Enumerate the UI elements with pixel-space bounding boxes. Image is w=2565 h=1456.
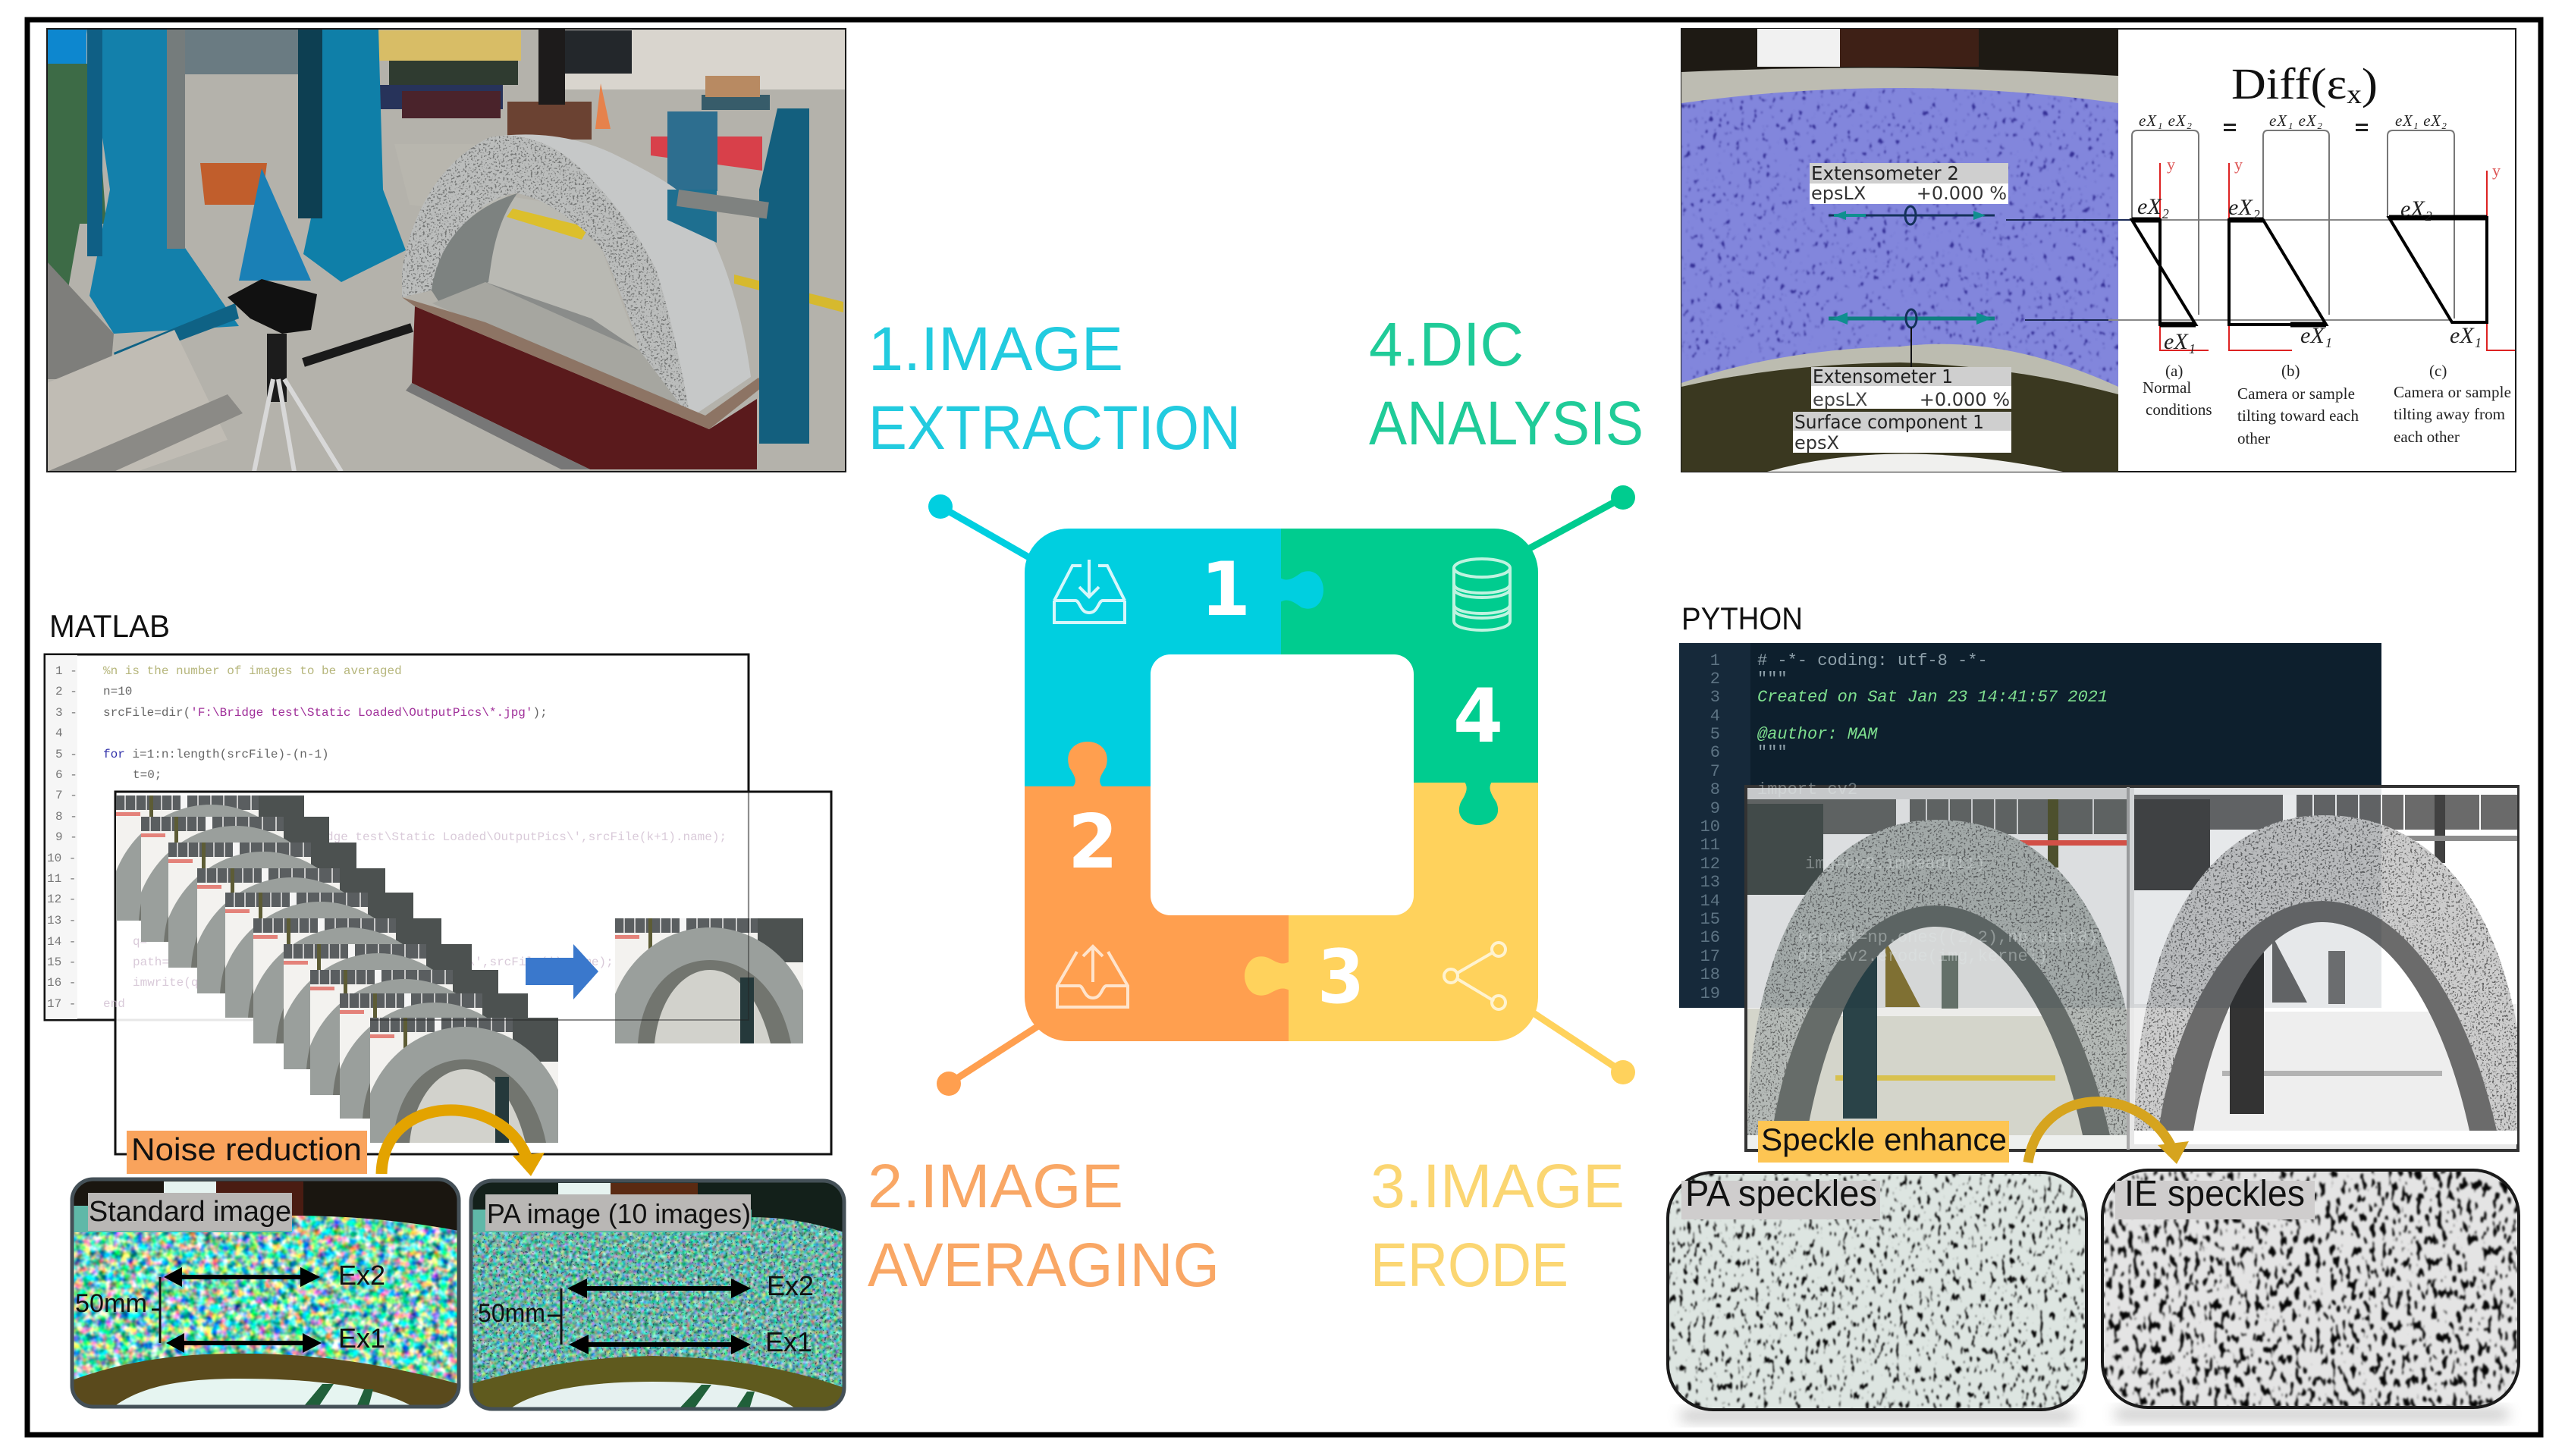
line numbers: 5: [1710, 725, 1720, 744]
title: 3.IMAGE ERODE: [1370, 1152, 1625, 1300]
panel: IE speckles: [2102, 1170, 2519, 1420]
line numbers: 3 -: [55, 706, 77, 720]
icon: download inbox: [1054, 560, 1125, 623]
diagram a: normal conditions: Normal: [2143, 378, 2191, 397]
code showing through photo: [1747, 780, 2381, 1008]
line numbers: 6: [1710, 743, 1720, 762]
diagram b: tilting toward: eX₁: [2300, 323, 2332, 348]
colour arch photo: [1747, 788, 2142, 1149]
connector: step 3 pin: [1534, 1013, 1635, 1084]
averaging overlay panel: [115, 792, 831, 1154]
diagram b: tilting toward: eX₁ eX₂: [2269, 111, 2322, 130]
extensometer 1 label: epsLX: [1813, 389, 1867, 410]
Ex labels: [338, 1260, 385, 1354]
diagram a: normal conditions: eX₁: [2164, 329, 2196, 354]
diagram a: normal conditions: [2132, 111, 2212, 419]
code text: Created on Sat Jan 23 14:41:57 2021: [1757, 688, 2108, 707]
50mm gauge: [478, 1288, 561, 1345]
line numbers: 1 -: [55, 664, 77, 678]
line numbers: 17 -: [47, 997, 76, 1011]
title: 4.DIC ANALYSIS: ANALYSIS: [1369, 389, 1644, 458]
diagram b: tilting toward: other: [2237, 429, 2270, 447]
title: 2.IMAGE AVERAGING: 2.IMAGE: [868, 1152, 1123, 1221]
line numbers: 10: [1700, 817, 1720, 836]
line numbers: 18: [1700, 965, 1720, 984]
faded code under overlay: path=strcat('F:\Bridge test\Static Loaded\Bath\',srcFile(i).name);: [133, 956, 614, 969]
diagram a: normal conditions: eX₂: [2137, 194, 2169, 219]
speckle comparison photos: [1746, 783, 2529, 1150]
code text: %n is the number of images to be averaged: [103, 664, 402, 678]
diagram c: tilting away: eX₁: [2450, 323, 2482, 348]
line numbers: 11: [1700, 836, 1720, 855]
code text: n=10: [103, 685, 132, 698]
title: 1.IMAGE EXTRACTION: [868, 315, 1241, 463]
line numbers: 13: [1700, 873, 1720, 892]
Ex1 arrow: [166, 1333, 322, 1353]
line numbers: 9 -: [55, 830, 77, 844]
line numbers: 5 -: [55, 748, 77, 761]
title: 1.IMAGE EXTRACTION: EXTRACTION: [868, 394, 1241, 463]
line numbers: 8 -: [55, 810, 77, 824]
faded code window edge: [370, 792, 749, 1020]
line numbers: 4: [1710, 707, 1720, 726]
surface component label: [1793, 411, 2011, 453]
diagram b: tilting toward: eX₂: [2228, 195, 2260, 220]
line numbers: 7 -: [55, 789, 77, 802]
panel: PA speckles: [1668, 1172, 2086, 1421]
title: 3.IMAGE ERODE: ERODE: [1370, 1231, 1568, 1300]
label: Noise reduction: Noise reduction: [131, 1131, 362, 1167]
diagram a: normal conditions: conditions: [2146, 400, 2212, 419]
code text: for i=1:n:length(srcFile)-(n-1): [103, 748, 329, 761]
code text: @author: MAM: [1757, 725, 1878, 744]
line numbers: 12: [1700, 855, 1720, 874]
Ex labels: Ex1: [338, 1323, 385, 1354]
diagram c: tilting away: [2388, 111, 2515, 446]
title: 1.IMAGE EXTRACTION: 1.IMAGE: [868, 315, 1123, 384]
line numbers: 13 -: [47, 914, 76, 927]
curved arrow: noise reduction: [381, 1110, 545, 1176]
diagram c: tilting away: each other: [2394, 428, 2460, 446]
connector: step 1 pin: [928, 494, 1033, 560]
extensometer 1 label: Extensometer 1: [1813, 366, 1953, 388]
Ex labels: Ex2: [338, 1260, 385, 1291]
line numbers: 7: [1710, 762, 1720, 781]
Python code window: [1679, 643, 2381, 1008]
puzzle nub: green: [1459, 782, 1498, 825]
50mm gauge: [75, 1277, 160, 1343]
Ex labels: Ex2: [767, 1270, 814, 1301]
line numbers: 19: [1700, 984, 1720, 1003]
panel: PA image: [471, 1181, 844, 1409]
line numbers: 12 -: [47, 893, 76, 906]
line numbers: 2: [1710, 670, 1720, 689]
DIC analysis panel: extensometer image and strain diagram: [1681, 29, 2516, 472]
faded code under overlay: end: [103, 997, 125, 1011]
icon: database: [1454, 559, 1510, 630]
grayscale enhanced arch photo: [2134, 783, 2529, 1144]
surface component label: epsX: [1794, 432, 1839, 453]
icon: share: [1444, 943, 1505, 1009]
diagram a: normal conditions: y: [2167, 155, 2175, 174]
code text: srcFile=dir('F:\Bridge test\Static Loaded\OutputPics\*.jpg');: [103, 706, 548, 720]
line numbers: 16: [1700, 928, 1720, 947]
numeral 1: 1: [1201, 547, 1251, 633]
line numbers: 2 -: [55, 685, 77, 698]
extensometer 2 label: [1810, 162, 2008, 204]
diagram b: tilting toward: Camera or sample: [2237, 384, 2355, 403]
line numbers: 10 -: [47, 852, 76, 865]
code showing through photo: kernel=np.ones((2,2),np.uint8): [1797, 928, 2098, 947]
code showing through photo: import cv2: [1757, 780, 1857, 799]
numeral 2: 2: [1068, 799, 1118, 886]
line numbers: 4: [55, 726, 63, 740]
title: 3.IMAGE ERODE: 3.IMAGE: [1370, 1152, 1625, 1221]
averaged result image: [606, 918, 814, 1043]
icon: upload inbox: [1057, 946, 1128, 1007]
code text: t=0;: [133, 768, 162, 782]
equals signs: [2224, 124, 2368, 131]
numeral 3: 3: [1317, 934, 1364, 1021]
line numbers: 9: [1710, 799, 1720, 818]
50mm gauge: 50mm: [75, 1289, 147, 1318]
line numbers: 3: [1710, 688, 1720, 707]
diagram title: Diff(ε: [2231, 59, 2337, 108]
diagram c: tilting away: Camera or sample: [2394, 383, 2511, 401]
diagram c: tilting away: eX₁ eX₂: [2395, 111, 2447, 130]
diagram a: normal conditions: (a): [2165, 362, 2183, 380]
line numbers: 15: [1700, 910, 1720, 929]
diagram b: tilting toward: y: [2234, 155, 2243, 174]
diagram c: tilting away: (c): [2429, 362, 2447, 380]
extensometer 2 label: epsLX: [1811, 183, 1866, 204]
diagram c: tilting away: eX₂: [2400, 196, 2432, 221]
title: 4.DIC ANALYSIS: 4.DIC: [1369, 310, 1524, 379]
line numbers: 11 -: [47, 872, 76, 886]
connector: step 2 pin: [937, 1025, 1041, 1096]
title: 2.IMAGE AVERAGING: [868, 1152, 1220, 1300]
centre hole: [1151, 654, 1414, 915]
diagram b: tilting toward: [2228, 111, 2359, 447]
faded code under overlay: q=: [133, 935, 147, 949]
diagram b: tilting toward: tilting toward each: [2237, 406, 2359, 425]
Ex labels: Ex1: [765, 1326, 812, 1357]
line numbers: 6 -: [55, 768, 77, 782]
line numbers: 15 -: [47, 956, 76, 969]
faded code under overlay: imwrite(q,path);: [133, 976, 250, 990]
diagram b: tilting toward: (b): [2281, 362, 2300, 380]
Ex2 arrow: [164, 1267, 320, 1287]
extensometer 2 label: +0.000 %: [1917, 183, 2007, 204]
PA speckles label: PA speckles: [1685, 1174, 1877, 1214]
extensometer 2 line: [1829, 206, 1995, 224]
standard image label: Standard image: [89, 1196, 291, 1228]
line numbers: 17: [1700, 947, 1720, 966]
diagram a: normal conditions: eX₁ eX₂: [2139, 111, 2192, 130]
blue arrow: [526, 944, 598, 999]
diagram c: tilting away: y: [2492, 161, 2501, 180]
line numbers: 14: [1700, 892, 1720, 911]
IE speckles label: IE speckles: [2124, 1174, 2305, 1214]
PA image label: PA image (10 images): [487, 1198, 751, 1229]
guide lines: [2006, 220, 2452, 320]
line numbers: 14 -: [47, 935, 76, 949]
line numbers: 8: [1710, 780, 1720, 799]
puzzle nub: cyan: [1280, 571, 1323, 609]
numeral 4: 4: [1453, 673, 1503, 760]
curved arrow: speckle enhance: [2028, 1102, 2189, 1164]
code text: """: [1757, 743, 1788, 762]
central four-piece puzzle: [1025, 529, 1538, 1041]
heading: MATLAB: MATLAB: [49, 608, 170, 644]
stack of ten input images: [107, 795, 569, 1143]
MATLAB code window: [45, 654, 749, 1020]
DIC image with blue strain field: [1681, 29, 2118, 472]
code showing through photo: img=cv2.imread(i1): [1805, 855, 1986, 874]
extensometer 1 label: [1811, 366, 2011, 410]
faded code under overlay: dge test\Static Loaded\OutputPics\',srcFile(k+1).name);: [326, 830, 727, 844]
puzzle nub: yellow: [1245, 956, 1289, 996]
photo: arch test setup with camera: [47, 29, 846, 472]
heading: PYTHON: PYTHON: [1681, 601, 1803, 636]
line numbers: 16 -: [47, 976, 76, 990]
surface component label: Surface component 1: [1794, 411, 1984, 433]
diagram c: tilting away: tilting away from: [2394, 405, 2505, 423]
code text: """: [1757, 670, 1788, 689]
code showing through photo: dst=cv2.erode(img,kernel): [1797, 947, 2048, 966]
extensometer 2 label: Extensometer 2: [1811, 162, 1959, 184]
label: Speckle enhance: Speckle enhance: [1761, 1122, 2007, 1157]
Ex2 arrow: [567, 1279, 751, 1298]
puzzle nub: orange: [1068, 742, 1107, 787]
extensometer 1 line: [1829, 309, 1995, 367]
extensometer 1 label: +0.000 %: [1920, 389, 2010, 410]
code text: # -*- coding: utf-8 -*-: [1757, 651, 1988, 670]
50mm gauge: 50mm: [478, 1299, 545, 1328]
title: 4.DIC ANALYSIS: [1369, 310, 1644, 458]
Ex labels: [765, 1270, 814, 1357]
line numbers: 1: [1710, 651, 1720, 670]
panel: standard image: [72, 1179, 459, 1407]
title: 2.IMAGE AVERAGING: AVERAGING: [868, 1231, 1220, 1300]
connector: step 4 pin: [1528, 485, 1635, 549]
diagram title: x: [2347, 79, 2362, 109]
Ex1 arrow: [569, 1335, 751, 1354]
diagram title: ): [2362, 59, 2378, 108]
